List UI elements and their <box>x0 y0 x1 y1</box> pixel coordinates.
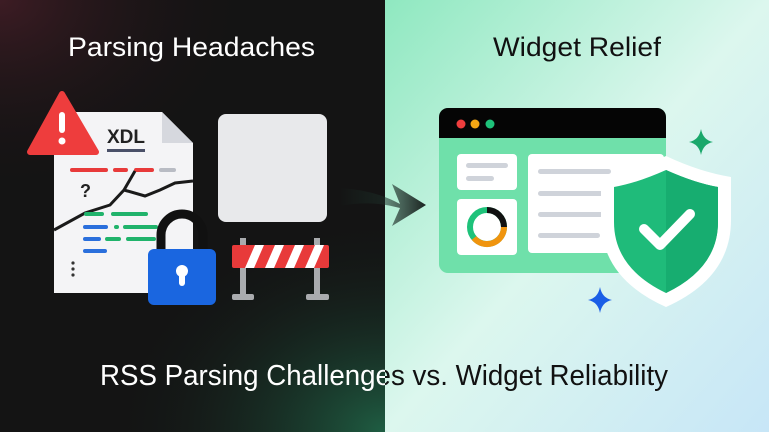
icon: shield with check <box>601 156 731 307</box>
icon: broken document: ? <box>80 181 91 201</box>
icon: warning triangle <box>30 94 96 152</box>
icon: blue sparkle <box>588 287 612 313</box>
heading: Parsing Headaches: Parsing Headaches <box>68 32 315 62</box>
icon: green sparkle <box>689 129 713 155</box>
card: donut chart <box>457 199 517 255</box>
background right <box>385 0 769 432</box>
blank gray panel <box>218 114 327 222</box>
background left <box>0 0 385 432</box>
icon: broken document <box>54 112 193 293</box>
main title: RSS Parsing Challenges vs. Widget Reliability <box>100 360 668 392</box>
heading: Widget Relief: Widget Relief <box>493 32 662 62</box>
main title: RSS Parsing Challenges vs. Widget Reliability <box>100 360 668 392</box>
icon: road barrier <box>232 238 329 300</box>
icon: padlock <box>148 214 216 305</box>
widget window <box>439 108 666 273</box>
card: list <box>528 154 664 253</box>
icon: broken document: XDL <box>107 127 145 148</box>
card: text lines <box>457 154 517 190</box>
arrow <box>340 184 426 226</box>
